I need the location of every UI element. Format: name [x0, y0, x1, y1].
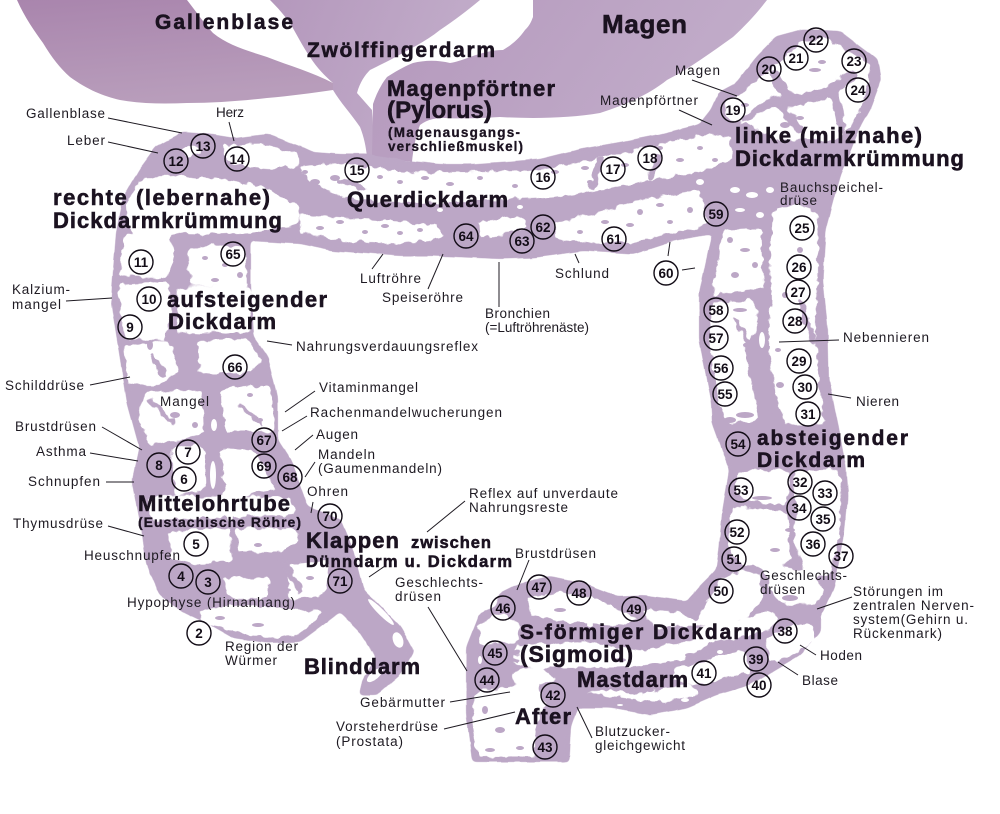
numbered zone markers: 30: [797, 380, 813, 395]
heading: S-förmiger Dickdarm (Sigmoid): (Sigmoid): [520, 641, 633, 667]
reflex labels: Nahrungsverdauungsreflex: [296, 339, 478, 354]
reflex labels: Schnupfen: [28, 474, 100, 489]
numbered zone markers: 20: [761, 62, 777, 77]
heading: Querdickdarm: Querdickdarm: [347, 187, 508, 212]
numbered zone markers: 14: [229, 152, 245, 167]
reflex labels: Ohren: [307, 484, 348, 499]
heading: Klappen zwischen Dünndarm u. Dickdarm: zwischen: [411, 534, 491, 552]
numbered zone markers: 44: [479, 673, 495, 688]
numbered zone markers: 31: [800, 407, 816, 422]
numbered zone markers: 46: [495, 601, 511, 616]
reflex labels: Magen: [675, 63, 720, 78]
speckles in colon wall and lumen: [147, 60, 826, 752]
numbered zone markers: 10: [141, 292, 157, 307]
numbered zone markers: 59: [708, 207, 724, 222]
reflex labels: Schilddrüse: [5, 378, 84, 393]
numbered zone markers: 3: [204, 575, 212, 590]
reflex labels: Leber: [67, 133, 106, 148]
reflex labels: Reflex auf unverdaute: [469, 486, 618, 501]
reflex labels: Augen: [316, 427, 358, 442]
reflex labels: Schlund: [555, 266, 609, 281]
numbered zone markers: 19: [725, 103, 741, 118]
heading: absteigender Dickdarm: Dickdarm: [757, 449, 865, 472]
numbered zone markers: 2: [195, 626, 203, 641]
reflex labels: drüse: [780, 193, 817, 208]
reflex labels: Würmer: [225, 653, 278, 668]
numbered zone markers: 28: [787, 314, 803, 329]
heading: aufsteigender Dickdarm: Dickdarm: [168, 309, 276, 334]
numbered zone markers: 57: [708, 331, 724, 346]
heading: Magenpförtner (Pylorus): Magenpförtner: [387, 76, 555, 101]
numbered zone markers: 8: [155, 458, 163, 473]
organ: gallbladder: [17, 0, 333, 104]
numbered zone markers: 39: [748, 652, 764, 667]
reflex labels: Gallenblase: [26, 106, 105, 121]
reflex labels: Bronchien: [485, 306, 550, 321]
heading: linke (milznahe) Dickdarmkrümmung: [735, 123, 964, 171]
numbered zone markers: 61: [606, 232, 622, 247]
reflex labels: Bauchspeichel-: [780, 180, 883, 195]
numbered zone markers: 37: [833, 549, 849, 564]
reflex labels: zentralen Nerven-: [853, 598, 974, 613]
organ: stomach and pylorus: [372, 0, 767, 162]
reflex labels: Mandeln: [318, 447, 375, 462]
reflex labels: Gebärmutter: [360, 695, 446, 710]
reflex labels: Rachenmandelwucherungen: [310, 405, 502, 420]
heading: Klappen zwischen Dünndarm u. Dickdarm: [306, 528, 512, 571]
numbered zone markers: 70: [322, 509, 338, 524]
heading: rechte (lebernahe) Dickdarmkrümmung: rechte (lebernahe): [53, 185, 270, 210]
numbered zone markers: 38: [777, 624, 793, 639]
reflex labels: (Gaumenmandeln): [318, 461, 442, 476]
numbered zone markers: 49: [626, 602, 642, 617]
leader lines: [66, 80, 852, 738]
numbered zone markers: 69: [256, 459, 272, 474]
numbered zone markers: 15: [349, 163, 365, 178]
numbered zone markers: 52: [729, 525, 745, 540]
numbered zone markers: 47: [531, 580, 547, 595]
heading: Zwölffingerdarm: Zwölffingerdarm: [307, 39, 495, 62]
numbered zone markers: [118, 28, 870, 759]
numbered zone markers: 42: [545, 688, 561, 703]
heading: Klappen zwischen Dünndarm u. Dickdarm: Dünndarm u. Dickdarm: [306, 553, 512, 571]
numbered zone markers: 16: [535, 170, 551, 185]
heading: aufsteigender Dickdarm: [167, 287, 327, 334]
reflex labels: Geschlechts-: [760, 568, 847, 583]
reflex labels: Speiseröhre: [382, 290, 463, 305]
numbered zone markers: 68: [282, 470, 298, 485]
reflex labels: gleichgewicht: [595, 738, 685, 753]
heading: Magenpförtner (Pylorus): (Pylorus): [387, 97, 492, 124]
heading: rechte (lebernahe) Dickdarmkrümmung: [53, 185, 282, 233]
heading: Magenpförtner (Pylorus): verschließmuskel): [388, 139, 523, 154]
reflex labels: drüsen: [760, 582, 805, 597]
numbered zone markers: 53: [733, 483, 749, 498]
numbered zone markers: 11: [134, 255, 149, 270]
numbered zone markers: 7: [184, 445, 192, 460]
numbered zone markers: 60: [658, 266, 674, 281]
numbered zone markers: 62: [535, 220, 551, 235]
numbered zone markers: 40: [751, 678, 767, 693]
reflex labels: Nahrungsreste: [469, 500, 568, 515]
reflex labels: Geschlechts-: [395, 575, 483, 590]
numbered zone markers: 51: [726, 552, 742, 567]
reflex labels: system(Gehirn u.: [853, 612, 968, 627]
numbered zone markers: 9: [126, 320, 134, 335]
reflex labels: Rückenmark): [853, 626, 942, 641]
reflex labels: Nebennieren: [843, 330, 929, 345]
numbered zone markers: 5: [192, 537, 200, 552]
numbered zone markers: 18: [642, 151, 658, 166]
numbered zone markers: 12: [168, 154, 184, 169]
reflex labels: (Prostata): [336, 734, 403, 749]
numbered zone markers: 50: [713, 584, 729, 599]
reflex labels: Störungen im: [853, 584, 943, 599]
reflex labels: (=Luftröhrenäste): [485, 320, 589, 335]
heading: Magen: Magen: [602, 9, 687, 39]
numbered zone markers: 54: [730, 437, 746, 452]
numbered zone markers: 33: [817, 486, 833, 501]
numbered zone markers: 64: [458, 229, 474, 244]
numbered zone markers: 34: [791, 501, 807, 516]
reflex labels: Hypophyse (Hirnanhang): [127, 595, 295, 610]
reflex labels: Heuschnupfen: [84, 548, 180, 563]
heading: absteigender Dickdarm: [757, 427, 908, 472]
heading: rechte (lebernahe) Dickdarmkrümmung: Dickdarmkrümmung: [53, 208, 282, 233]
appendix lumen: [365, 597, 405, 684]
reflex labels: Vorsteherdrüse: [336, 719, 438, 734]
reflex labels: Magenpförtner: [600, 93, 698, 108]
reflex labels: Luftröhre: [360, 271, 421, 286]
reflex labels: drüsen: [395, 589, 441, 604]
numbered zone markers: 45: [487, 646, 503, 661]
numbered zone markers: 66: [227, 360, 243, 375]
numbered zone markers: 17: [605, 162, 621, 177]
numbered zone markers: 22: [808, 33, 824, 48]
heading: Magenpförtner (Pylorus): (Magenausgangs-: [388, 125, 520, 140]
numbered zone markers: 67: [256, 433, 272, 448]
heading: Klappen zwischen Dünndarm u. Dickdarm: Klappen: [306, 528, 399, 553]
heading: Mittelohrtube: [138, 491, 301, 530]
numbered zone markers: 6: [180, 472, 188, 487]
numbered zone markers: 26: [791, 260, 807, 275]
numbered zone markers: 27: [790, 285, 806, 300]
numbered zone markers: 55: [717, 387, 733, 402]
numbered zone markers: 25: [794, 221, 810, 236]
reflex labels: Brustdrüsen: [15, 419, 96, 434]
reflex labels: Thymusdrüse: [13, 516, 103, 531]
numbered zone markers: 58: [708, 303, 724, 318]
numbered zone markers: 13: [195, 139, 211, 154]
reflex labels: Vitaminmangel: [319, 380, 418, 395]
reflex labels: Herz: [216, 105, 244, 120]
numbered zone markers: 36: [805, 537, 821, 552]
heading: aufsteigender Dickdarm: aufsteigender: [167, 287, 327, 312]
heading: linke (milznahe) Dickdarmkrümmung: linke (milznahe): [735, 123, 922, 148]
heading: Mittelohrtube: (Eustachische Röhre): [138, 514, 301, 530]
numbered zone markers: 48: [571, 586, 587, 601]
numbered zone markers: 35: [815, 512, 831, 527]
heading: absteigender Dickdarm: absteigender: [757, 427, 908, 450]
heading: S-förmiger Dickdarm (Sigmoid): S-förmiger Dickdarm: [520, 621, 762, 644]
reflex labels: Kalzium-: [12, 282, 70, 297]
reflex labels: Hoden: [820, 648, 862, 663]
heading: S-förmiger Dickdarm (Sigmoid): [520, 621, 762, 667]
numbered zone markers: 4: [177, 569, 185, 584]
numbered zone markers: 71: [332, 574, 348, 589]
heading: Magenpförtner (Pylorus): [387, 76, 555, 154]
reflex labels: Mangel: [160, 394, 209, 409]
numbered zone markers: 32: [792, 475, 808, 490]
reflex labels: Asthma: [36, 444, 86, 459]
heading: Gallenblase: Gallenblase: [155, 11, 293, 34]
numbered zone markers: 24: [850, 83, 866, 98]
reflex labels: mangel: [12, 297, 61, 312]
reflex labels: Region der: [225, 639, 298, 654]
numbered zone markers: 23: [846, 54, 862, 69]
heading: Blinddarm: Blinddarm: [304, 654, 420, 679]
numbered zone markers: 63: [514, 234, 530, 249]
heading: Mittelohrtube: Mittelohrtube: [138, 491, 290, 516]
large intestine silhouette: [112, 30, 880, 761]
organ: duodenum and stalk: [270, 0, 480, 157]
numbered zone markers: 29: [791, 354, 807, 369]
numbered zone markers: 56: [713, 361, 729, 376]
numbered zone markers: 43: [537, 740, 553, 755]
heading: After: After: [515, 704, 571, 729]
reflex labels: Blutzucker-: [595, 724, 670, 739]
heading: linke (milznahe) Dickdarmkrümmung: Dickdarmkrümmung: [735, 146, 964, 171]
reflex labels: Brustdrüsen: [515, 546, 596, 561]
numbered zone markers: 41: [696, 666, 712, 681]
colon septa: [150, 75, 852, 672]
numbered zone markers: 21: [788, 51, 804, 66]
reflex labels: Nieren: [856, 394, 899, 409]
heading: Mastdarm: Mastdarm: [577, 667, 688, 692]
lumen: white haustra inside the colon: [118, 37, 870, 758]
numbered zone markers: 65: [225, 247, 241, 262]
reflex labels: Blase: [802, 673, 838, 688]
